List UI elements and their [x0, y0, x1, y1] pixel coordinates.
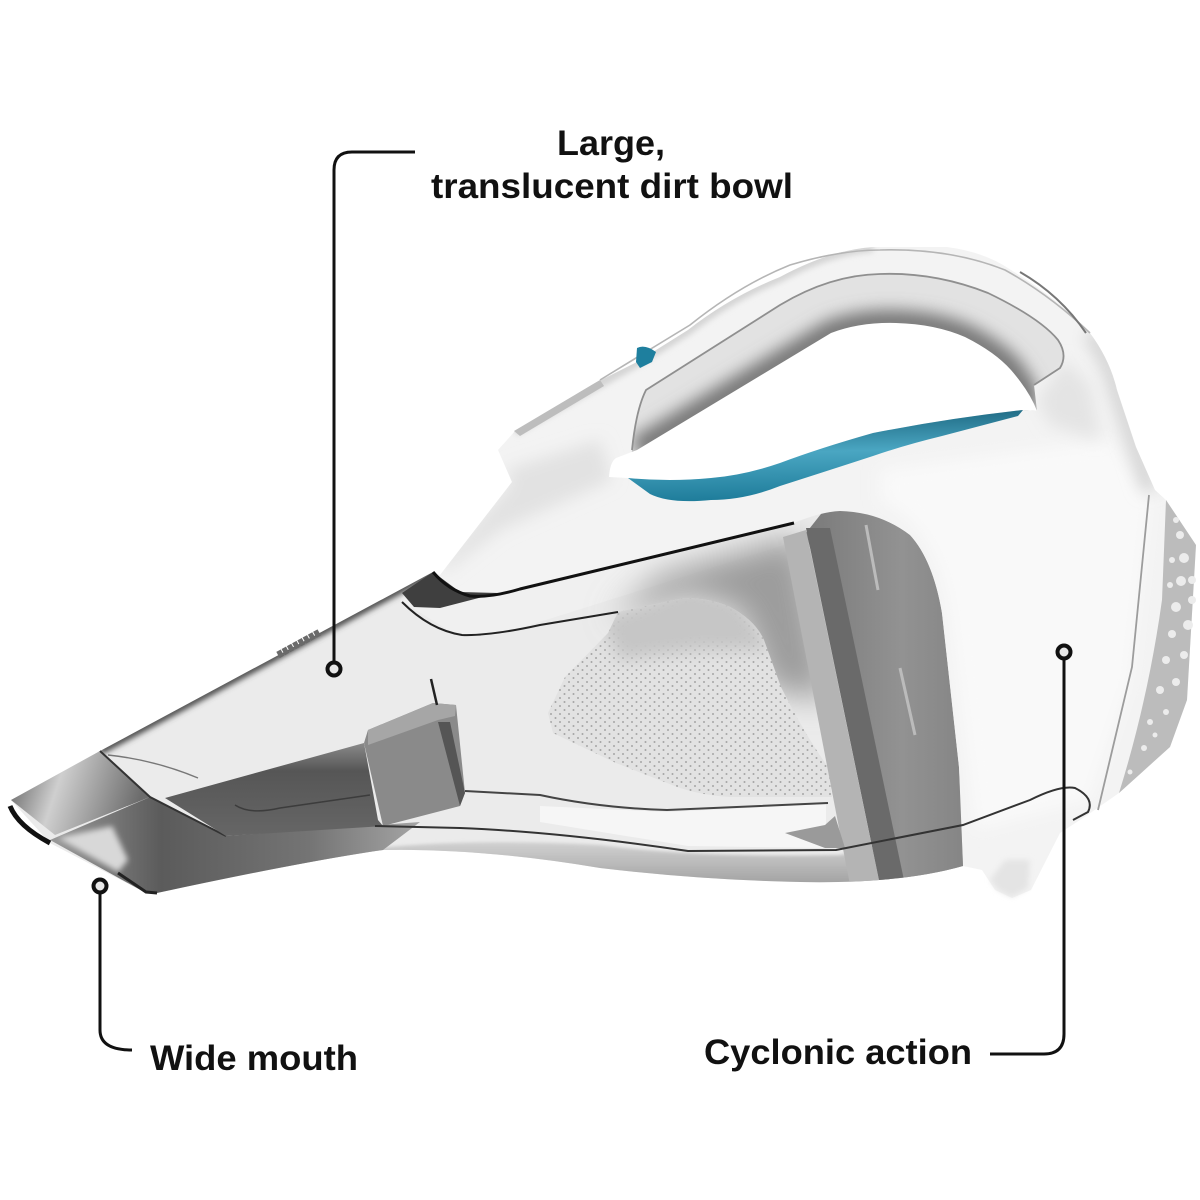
- power slider panel: [514, 380, 604, 436]
- inner tube: [165, 743, 383, 836]
- edge shading: [1090, 333, 1150, 490]
- handle right shading: [1030, 368, 1095, 434]
- collar end: [438, 722, 465, 806]
- callout: dirt bowl text: [431, 124, 793, 206]
- vacuum illustration: [0, 247, 1196, 900]
- filter top shade: [604, 598, 766, 662]
- panel slots: [866, 525, 915, 735]
- light channel: [783, 530, 880, 885]
- filter: [548, 598, 832, 797]
- neck shading: [452, 444, 609, 562]
- rear seam: [1098, 495, 1149, 810]
- bowl top edge shadow: [100, 572, 433, 751]
- bowl lower shading: [282, 842, 963, 882]
- nozzle lip highlight: [58, 826, 128, 872]
- collar pin: [431, 679, 437, 705]
- bowl clear body: [16, 806, 134, 886]
- tube collar: [364, 703, 465, 826]
- collar top: [368, 703, 456, 745]
- inner lower glare: [540, 804, 826, 848]
- bowl brand label: [278, 632, 320, 655]
- bowl second line: [402, 602, 618, 635]
- callout: dirt bowl text: Large,: [557, 124, 665, 163]
- bowl inner curve lower: [375, 788, 1090, 851]
- callout: dirt bowl leader: [328, 152, 415, 676]
- callout: wide mouth text: Wide mouth: [150, 1039, 358, 1078]
- callout: wide mouth leader: [94, 880, 132, 1050]
- grip panel outline: [632, 274, 1064, 450]
- callout: cyclonic leader: [990, 646, 1070, 1054]
- vacuum body silhouette: [11, 247, 1196, 898]
- callout: dirt bowl text: translucent dirt bowl: [431, 167, 793, 206]
- nozzle dark lower piece: [50, 797, 420, 893]
- handle top edge shading: [515, 247, 873, 431]
- rear seal panel: [806, 505, 965, 885]
- blue accent strip: [628, 410, 1023, 501]
- callout: cyclonic text: Cyclonic action: [704, 1033, 972, 1072]
- dark wedge at bowl latch: [402, 572, 498, 608]
- handle opening: [609, 323, 1037, 480]
- rear body highlight: [880, 440, 1150, 830]
- icon: blue slider button: [636, 347, 656, 368]
- body shading: [440, 247, 1150, 830]
- rear grille: [1119, 500, 1196, 793]
- bowl top band: [400, 500, 800, 635]
- tube inset line: [235, 795, 370, 811]
- handle top outline: [600, 250, 1090, 380]
- bowl inner curve upper: [465, 791, 828, 810]
- flap line: [108, 755, 198, 778]
- nozzle seam: [100, 751, 226, 836]
- nozzle lower edge: [118, 873, 157, 893]
- latch detail: [785, 816, 845, 848]
- bowl top black line: [433, 523, 794, 596]
- grip shaded panel: [632, 275, 1062, 452]
- dirt bowl: [0, 500, 980, 900]
- nozzle front edge: [10, 806, 50, 843]
- dark channel: [806, 528, 905, 885]
- nozzle upper piece: [11, 751, 150, 835]
- handle rear dark trim: [1020, 272, 1086, 333]
- bowl rear wall shadow: [610, 535, 830, 700]
- base foot shading: [990, 860, 1030, 897]
